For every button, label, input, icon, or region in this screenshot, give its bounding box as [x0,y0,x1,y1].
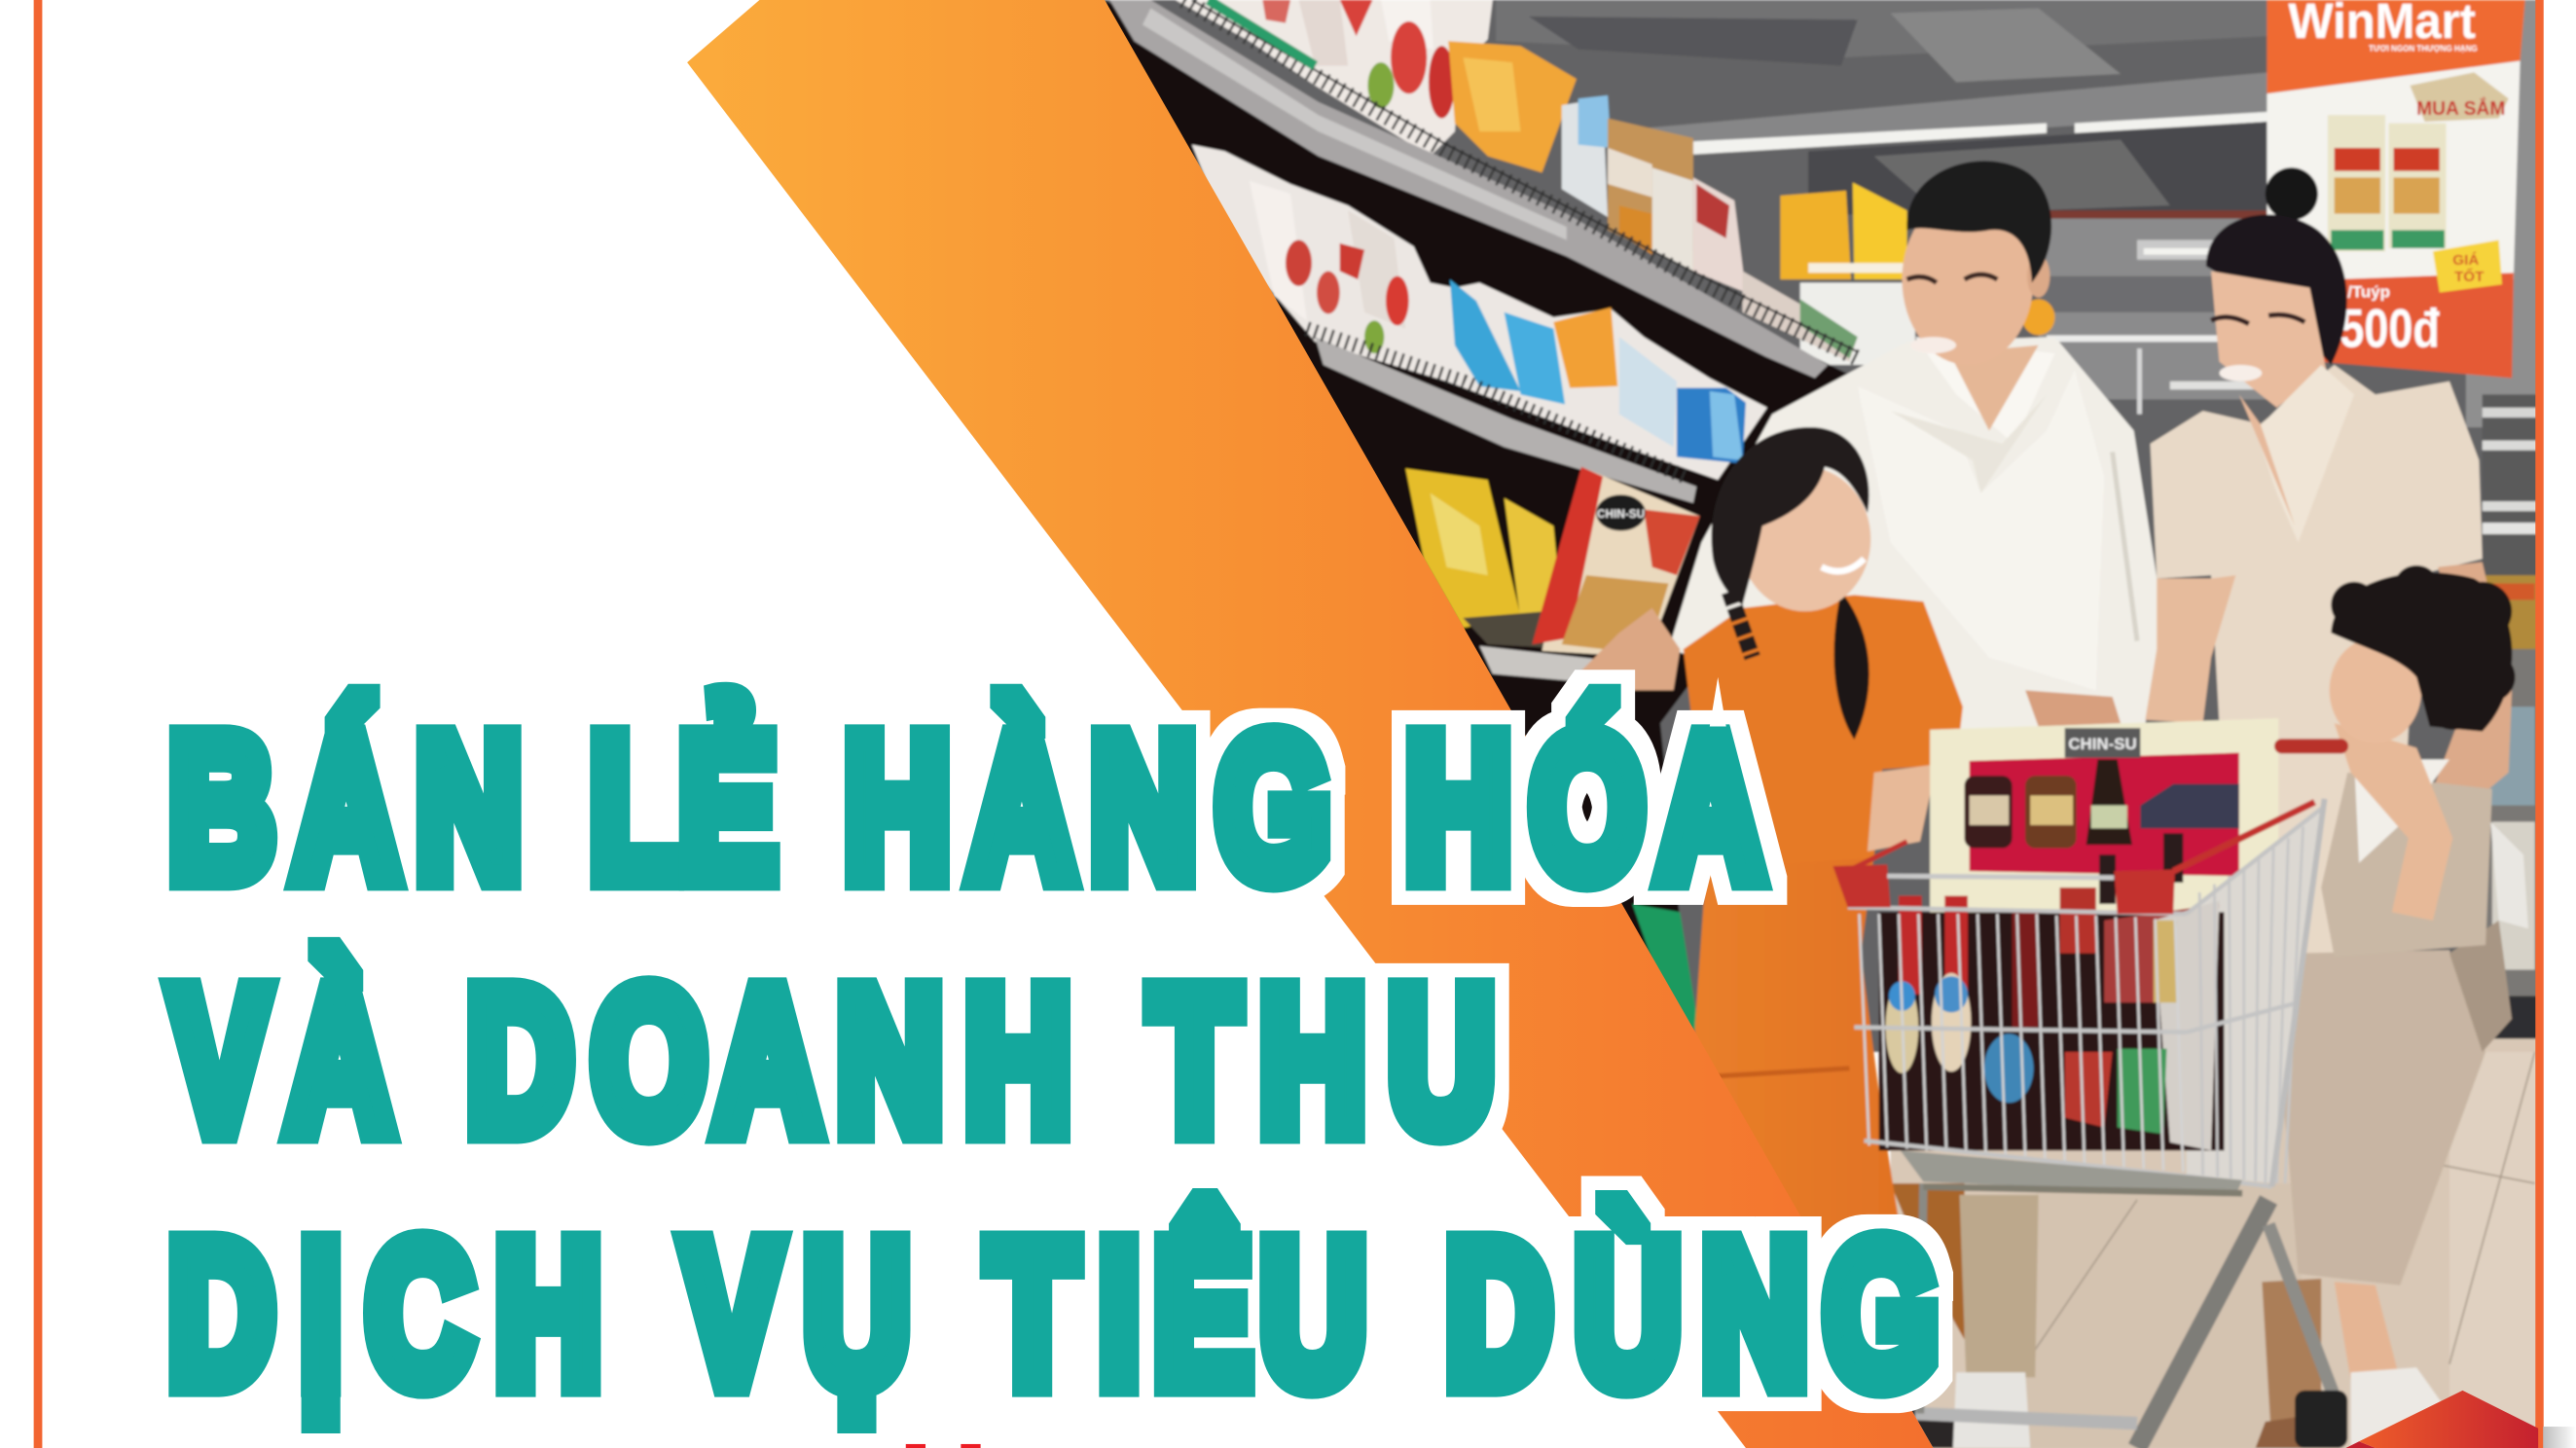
CHIN-SU gift box: CHIN-SU [2068,735,2137,753]
third shelf bags: CHIN-SU [1597,507,1645,521]
second shelf products [1192,145,1767,480]
daughter [1578,427,1963,1448]
WinMart banner: MUA SẮM [2416,96,2505,120]
photo: family shopping in a supermarket [1085,0,2548,1448]
WinMart banner: /Tuýp [2347,283,2390,302]
corner red shape [2346,1391,2538,1448]
father [1669,161,2166,1448]
cart wires [1848,799,2325,1195]
CHIN-SU gift box [1930,718,2278,921]
title outline spike [1710,677,1726,727]
WinMart banner: GIÁ [2452,252,2479,269]
ceiling and store background [1085,0,2548,1052]
title line 3: DỊCH VỤ TIÊU DÙNG [168,1200,1939,1428]
cart handle [1832,746,2340,914]
third shelf edge [1479,646,1641,687]
yellow display stand [1780,182,2055,365]
green goods under shelf [1632,904,1700,1035]
shopping cart [1832,718,2347,1448]
top shelf products [1176,0,1858,362]
orange diagonal band [687,0,1934,1448]
WinMart banner: TỐT [2454,268,2485,285]
WinMart banner: TƯƠI NGON THƯỢNG HẠNG [2369,43,2478,53]
mother [2145,167,2512,1448]
cart contents [1879,809,2321,1183]
title [168,694,1939,1428]
left border line [34,0,42,1448]
WinMart banner: .500đ [2328,298,2440,358]
supermarket shelves [1105,0,1858,1052]
corner shadow [2543,1427,2576,1448]
second shelf edge and wire rail [1307,329,1696,503]
cart frame and wheels [1915,1183,2347,1448]
floor [1891,1038,2548,1448]
third shelf bags [1405,467,1700,658]
son [2277,565,2528,1448]
right border line [2535,0,2544,1448]
WinMart banner [2267,0,2525,378]
title line 1: BÁN LẺ HÀNG HÓA [168,694,1763,922]
top shelf edge and wire rail [1109,0,1858,378]
clipped red text tops at bottom edge [906,1444,981,1448]
title line 2: VÀ DOANH THU [170,947,1495,1175]
